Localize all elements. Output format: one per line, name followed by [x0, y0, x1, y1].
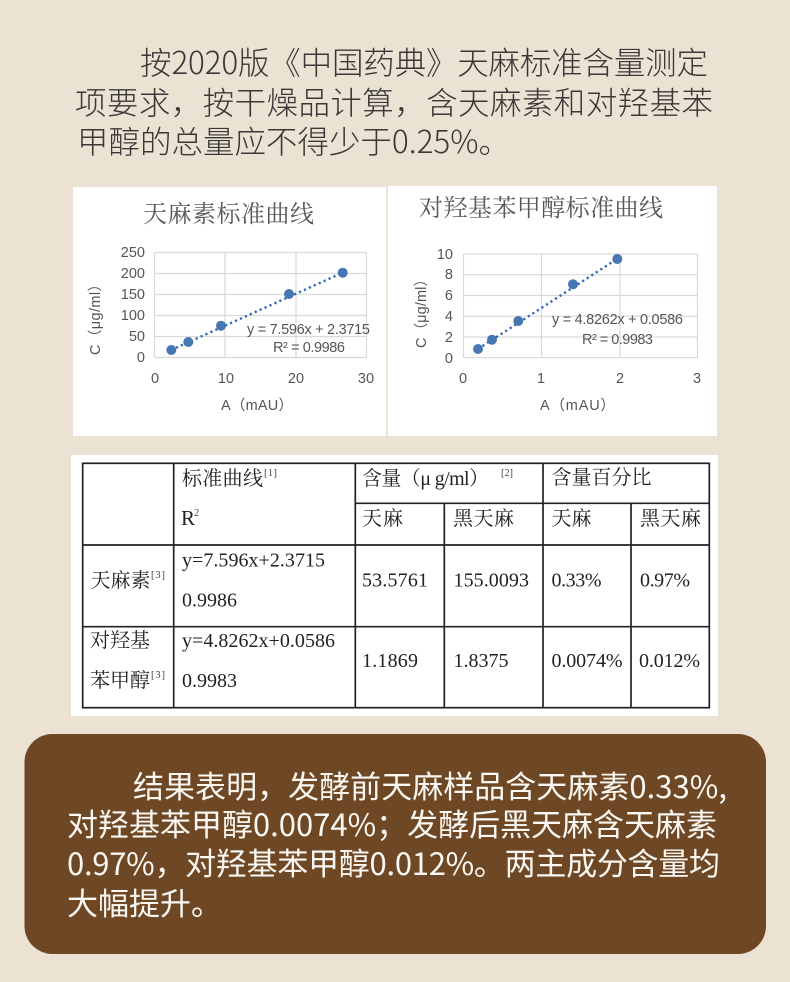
- conclusion text: 结果表明，发酵前天麻样品含天麻素0.33%,: [133, 762, 727, 807]
- y axis ticks: 150: [121, 287, 145, 303]
- trendline: [171, 272, 343, 350]
- table header row: 天麻: [552, 507, 592, 530]
- conclusion text: 0.97%，对羟基苯甲醇0.012%。两主成分含量均: [67, 839, 720, 884]
- table row: 天麻素: 0.9986: [182, 590, 237, 612]
- y axis ticks: [121, 245, 145, 366]
- conclusion text: 对羟基苯甲醇0.0074%；发酵后黑天麻含天麻素: [67, 800, 717, 845]
- y axis ticks: 0: [445, 351, 453, 367]
- intro text: 项要求，按干燥品计算，含天麻素和对羟基苯: [75, 78, 713, 124]
- axis title x: A（mAU）: [221, 397, 293, 414]
- table row: 对羟基苯甲醇: 0.9983: [182, 670, 237, 692]
- table row: 对羟基苯甲醇: y=4.8262x+0.0586: [182, 630, 335, 652]
- intro text: 按2020版《中国药典》天麻标准含量测定: [140, 38, 708, 84]
- axis title x: A（mAU）: [540, 397, 615, 414]
- table header row: 标准曲线: [182, 467, 263, 490]
- x axis ticks: 0: [459, 371, 467, 387]
- table header row: [1]: [264, 468, 277, 479]
- y axis ticks: 4: [445, 309, 453, 325]
- table row: 对羟基苯甲醇: 0.012%: [639, 650, 700, 672]
- plot grid: [154, 252, 366, 358]
- equation: y = 4.8262x + 0.0586: [552, 312, 683, 328]
- data points: [166, 268, 348, 355]
- x axis ticks: 10: [218, 371, 234, 387]
- conclusion text: [67, 762, 727, 924]
- axis title y: C（μg/ml）: [413, 272, 430, 348]
- conclusion text: 大幅提升。: [67, 879, 222, 924]
- table header row: 含量百分比: [552, 466, 652, 489]
- data points: [473, 254, 622, 354]
- y axis ticks: 2: [445, 330, 453, 346]
- x axis ticks: 20: [288, 371, 304, 387]
- results table: [71, 455, 718, 716]
- table row: 天麻素: [3]: [151, 570, 165, 581]
- chart title: 天麻素标准曲线: [143, 194, 314, 229]
- equation: R² = 0.9983: [582, 332, 653, 348]
- equation: [247, 322, 370, 356]
- equation: R² = 0.9986: [273, 340, 345, 356]
- table header row: 含量（μ g/ml）: [362, 467, 489, 490]
- table row: 对羟基苯甲醇: [3]: [151, 670, 165, 681]
- y axis ticks: 10: [437, 247, 453, 263]
- table row: 对羟基苯甲醇: [90, 629, 700, 692]
- y axis ticks: 6: [445, 288, 453, 304]
- x axis ticks: 2: [616, 371, 624, 387]
- table header row: 黑天麻: [640, 507, 701, 530]
- x axis ticks: 0: [151, 371, 159, 387]
- chart panel: 天麻素标准曲线: [73, 187, 386, 436]
- table header row: 2: [194, 508, 199, 519]
- trendline: [478, 259, 617, 349]
- y axis ticks: 8: [445, 267, 453, 283]
- table row: 天麻素: 0.33%: [552, 570, 602, 592]
- y axis ticks: 50: [129, 329, 145, 345]
- intro text: 甲醇的总量应不得少于0.25%。: [77, 117, 510, 163]
- chart title: 对羟基苯甲醇标准曲线: [419, 188, 663, 223]
- table header row: [2]: [501, 468, 513, 479]
- table header row: 天麻: [362, 507, 403, 530]
- y axis ticks: 250: [121, 245, 145, 261]
- table row: 对羟基苯甲醇: 对羟基: [90, 629, 150, 652]
- table row: 天麻素: 53.5761: [362, 570, 428, 592]
- table row: 对羟基苯甲醇: 1.8375: [454, 650, 508, 672]
- table row: 天麻素: y=7.596x+2.3715: [182, 550, 325, 572]
- y axis ticks: 0: [137, 350, 145, 366]
- table row: 对羟基苯甲醇: 苯甲醇: [90, 669, 150, 692]
- x axis ticks: [459, 371, 701, 387]
- x axis ticks: 30: [358, 371, 374, 387]
- y axis ticks: 100: [121, 308, 145, 324]
- table row: 对羟基苯甲醇: 1.1869: [362, 650, 418, 672]
- equation: [552, 312, 683, 348]
- axis title y: C（μg/ml）: [87, 277, 104, 355]
- table header row: 黑天麻: [453, 507, 514, 530]
- x axis ticks: [151, 371, 374, 387]
- table header row: R: [181, 506, 195, 530]
- plot grid: [464, 254, 698, 358]
- table row: 对羟基苯甲醇: 0.0074%: [552, 650, 622, 672]
- chart panel: 对羟基苯甲醇标准曲线: [388, 186, 717, 436]
- y axis ticks: 200: [121, 266, 145, 282]
- equation: y = 7.596x + 2.3715: [247, 322, 370, 338]
- intro text: [75, 38, 713, 163]
- x axis ticks: 3: [693, 371, 701, 387]
- y axis ticks: [437, 247, 453, 367]
- table row: 天麻素: 0.97%: [640, 570, 690, 592]
- table header row: [181, 466, 701, 530]
- x axis ticks: 1: [537, 371, 545, 387]
- table row: 天麻素: [90, 550, 690, 612]
- table row: 天麻素: 天麻素: [90, 569, 150, 592]
- table grid: [83, 463, 709, 708]
- table row: 天麻素: 155.0093: [454, 570, 529, 592]
- conclusion panel: [24, 734, 766, 954]
